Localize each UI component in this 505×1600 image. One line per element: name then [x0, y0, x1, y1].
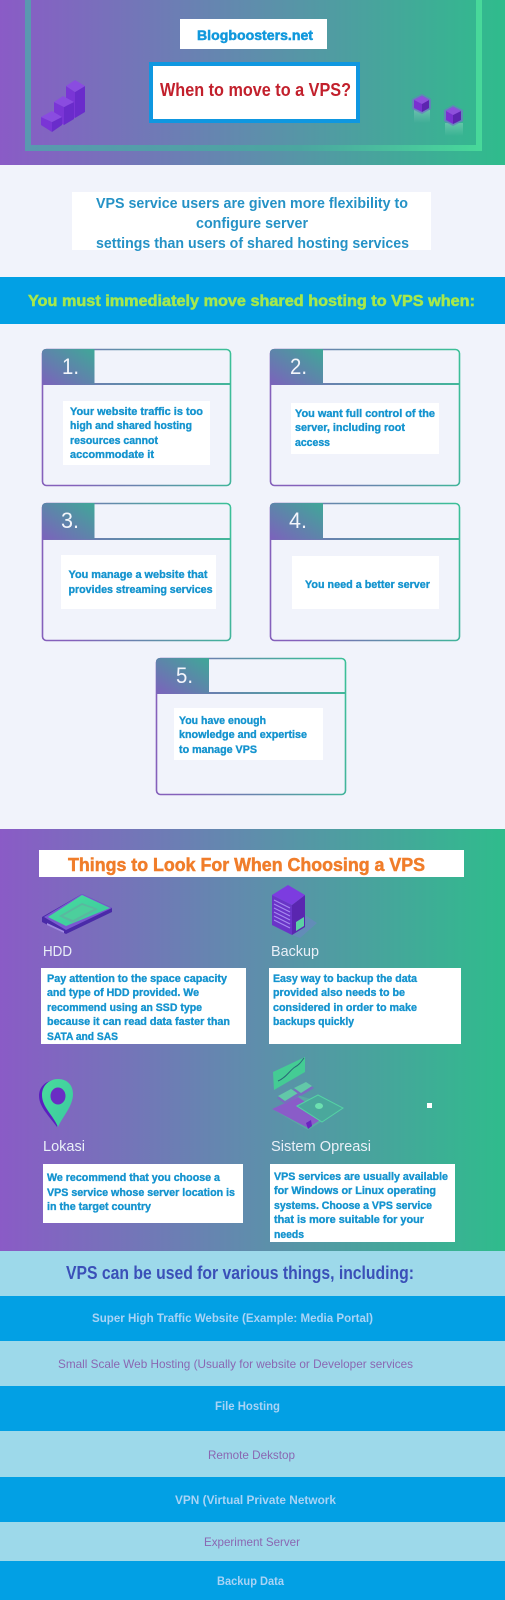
text: HDD description: because it can read data faster than	[47, 1016, 230, 1028]
row: small scale web hosting: Small Scale Web Hosting (Usually for website or Developer services	[58, 1357, 413, 1371]
text: Backup description: Easy way to backup the data	[273, 973, 418, 985]
label: Backup: Backup	[271, 943, 319, 960]
text: Sistem Opreasi description: for Windows or Linux operating	[274, 1185, 436, 1197]
card 1 text: Your website traffic is too	[70, 406, 203, 418]
text: Lokasi description: VPS service whose server location is	[47, 1187, 235, 1199]
icon: server	[272, 885, 317, 938]
section heading: Things to Look For When Choosing a VPS	[68, 855, 425, 875]
text: Backup description: considered in order to make	[273, 1002, 417, 1014]
card 5	[156, 658, 346, 794]
card 5 text: knowledge and expertise	[179, 729, 307, 741]
card 2 text: You want full control of the	[295, 408, 435, 420]
text: HDD description: recommend using an SSD type	[47, 1002, 202, 1014]
card 2: 2.	[290, 354, 307, 379]
card 2 text: access	[295, 437, 330, 449]
text: HDD description: Pay attention to the space capacity	[47, 973, 228, 985]
row: backup data: Backup Data	[217, 1574, 284, 1588]
white dot	[427, 1103, 432, 1108]
panel: things to look for	[0, 829, 505, 1251]
card 3 text: provides streaming services	[68, 584, 212, 596]
row: remote desktop: Remote Dekstop	[208, 1448, 295, 1462]
text: HDD description: and type of HDD provided. We	[47, 987, 199, 999]
card 2	[270, 349, 460, 486]
card 3	[42, 503, 231, 640]
card 2 text	[291, 403, 439, 454]
text: HDD description: SATA and SAS	[47, 1031, 118, 1043]
brand label: Blogboosters.net	[197, 28, 314, 43]
card 4: 4.	[289, 508, 307, 533]
card 1 text: resources cannot	[70, 435, 158, 447]
intro text block: configure server	[196, 215, 308, 232]
panel: VPS uses list	[0, 1251, 505, 1600]
title	[151, 64, 358, 121]
text: Backup description: provided also needs to be	[273, 987, 405, 999]
row: backup data	[0, 1561, 505, 1600]
brand label	[180, 19, 327, 49]
section heading	[39, 850, 464, 877]
heading band: move to VPS	[0, 277, 505, 324]
row: remote desktop	[0, 1431, 505, 1477]
row: file hosting: File Hosting	[215, 1399, 280, 1413]
row: VPN: VPN (Virtual Private Network	[175, 1493, 336, 1507]
row: file hosting	[0, 1386, 505, 1431]
row: super high traffic website: Super High Traffic Website (Example: Media Portal)	[92, 1311, 373, 1325]
intro text block: VPS service users are given more flexibility to	[96, 195, 408, 212]
text: Backup description	[269, 968, 461, 1044]
icon: location pin	[39, 1079, 73, 1127]
card 3: 3.	[61, 508, 79, 533]
title: When to move to a VPS?	[160, 80, 351, 100]
text: Sistem Opreasi description: systems. Choose a VPS service	[274, 1200, 432, 1212]
label: Lokasi: Lokasi	[43, 1138, 85, 1155]
card 1 text: high and shared hosting	[70, 420, 192, 432]
intro text block	[72, 192, 431, 252]
card 4	[270, 503, 460, 640]
intro text block: settings than users of shared hosting services	[96, 235, 409, 252]
card 2 text: server, including root	[295, 422, 405, 434]
card 5: 5.	[176, 663, 193, 688]
card 4 text	[292, 556, 439, 609]
panel: header	[0, 0, 505, 165]
card 4 text: You need a better server	[305, 579, 431, 591]
card 1 text: accommodate it	[70, 449, 154, 461]
uses heading: VPS can be used for various things, including:	[66, 1263, 414, 1283]
card 1: 1.	[62, 354, 79, 379]
icon: hard drive	[42, 894, 112, 934]
text: Sistem Opreasi description	[270, 1164, 455, 1242]
card 5 text: You have enough	[179, 715, 266, 727]
card 5 text	[174, 708, 323, 760]
text: Sistem Opreasi description: needs	[274, 1229, 304, 1241]
uses heading	[0, 1251, 505, 1296]
label: HDD: HDD	[43, 943, 72, 960]
card 1	[42, 349, 231, 486]
icon: operating system dashboard	[272, 1057, 343, 1130]
text: Lokasi description: We recommend that you choose a	[47, 1172, 221, 1184]
text: Lokasi description: in the target country	[47, 1201, 152, 1213]
text: Lokasi description	[43, 1164, 243, 1223]
card 3 text	[61, 555, 216, 609]
icon: stacked bars	[41, 80, 85, 132]
row: experiment server	[0, 1522, 505, 1561]
card 1 text	[63, 401, 210, 465]
card 3 text: You manage a website that	[68, 569, 208, 581]
row: small scale web hosting	[0, 1341, 505, 1386]
card 5 text: to manage VPS	[179, 744, 257, 756]
text: Backup description: backups quickly	[273, 1016, 355, 1028]
label: Sistem Opreasi: Sistem Opreasi	[271, 1138, 371, 1155]
row: super high traffic website	[0, 1296, 505, 1341]
row: experiment server: Experiment Server	[204, 1535, 300, 1549]
icon: cubes	[412, 94, 463, 136]
row: VPN	[0, 1477, 505, 1522]
heading band: move to VPS: You must immediately move shared hosting to VPS when:	[28, 293, 475, 310]
text: Sistem Opreasi description: VPS services are usually available	[274, 1171, 448, 1183]
text: HDD description	[41, 968, 246, 1044]
text: Sistem Opreasi description: that is more suitable for your	[274, 1214, 425, 1226]
